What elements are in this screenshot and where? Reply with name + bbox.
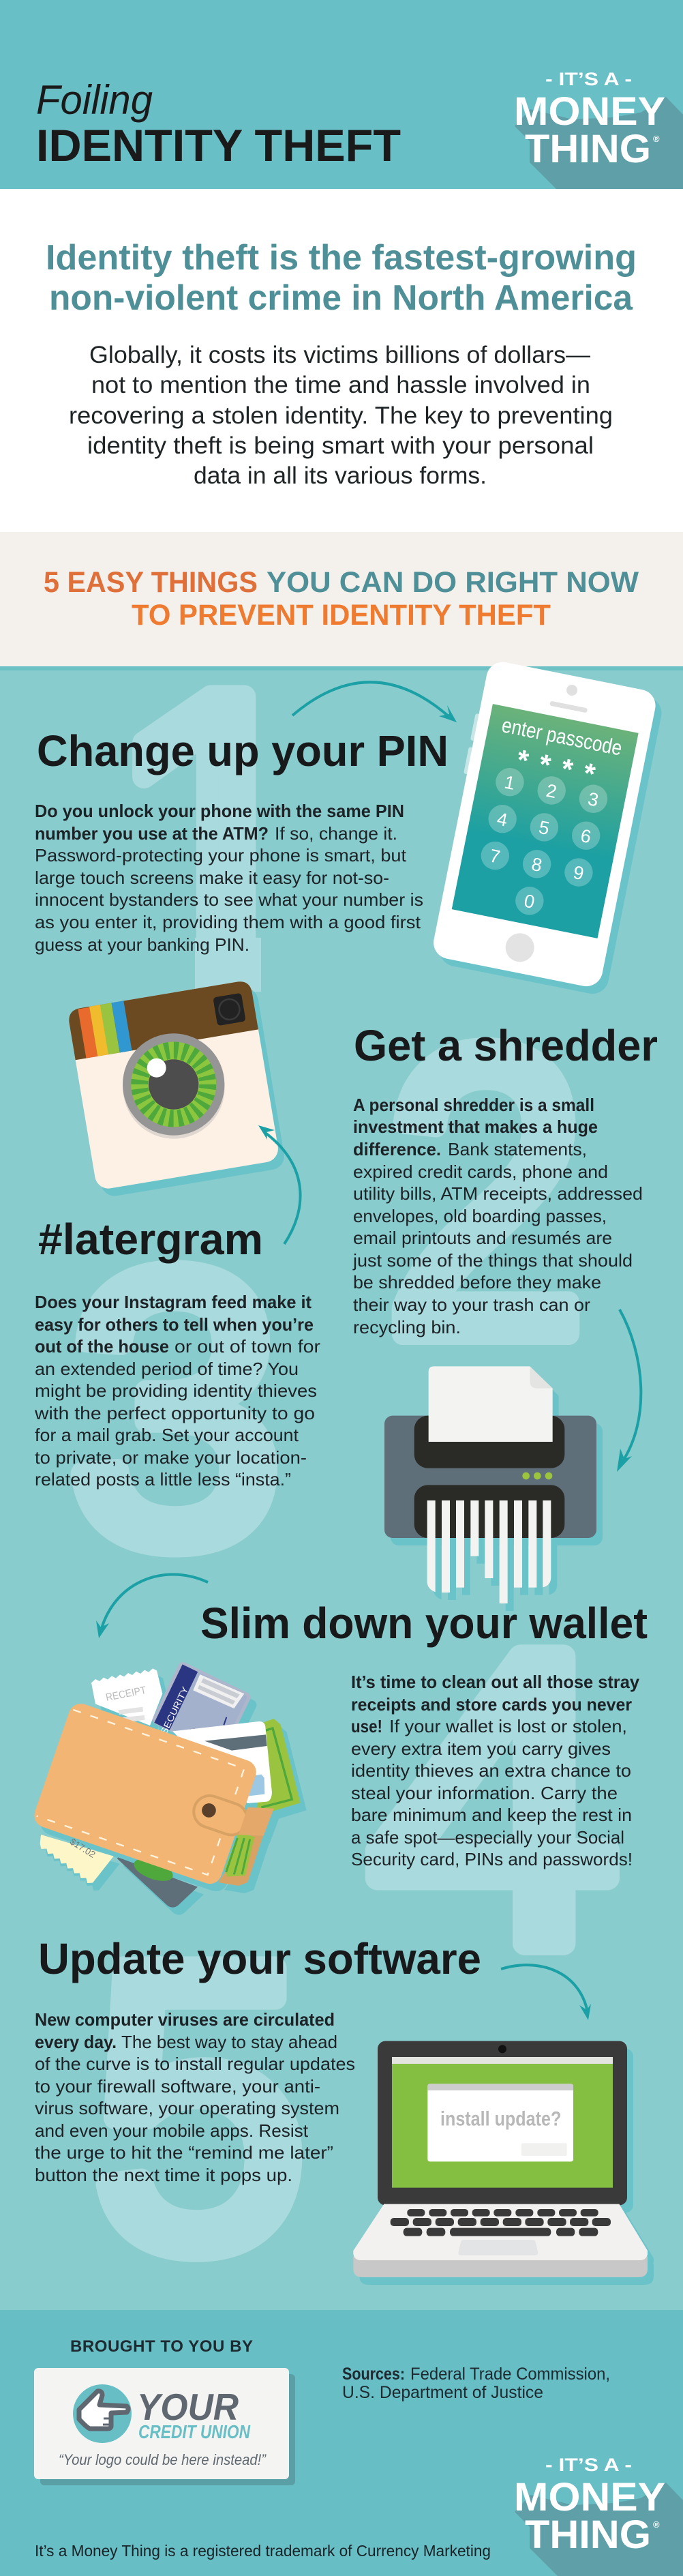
logo: It's a Money Thing footer xyxy=(514,2455,683,2576)
body text: be shredded before they make xyxy=(353,1272,601,1292)
sponsor logo card: CREDIT UNION xyxy=(138,2421,251,2442)
arrow to laptop xyxy=(501,1965,591,2020)
section 2: get a shredder xyxy=(352,1021,658,1603)
panel: 5 easy things banner: 5 EASY THINGS xyxy=(44,566,258,599)
body text: or out of town for xyxy=(174,1336,320,1357)
icon: phone: 4 xyxy=(496,808,509,831)
title: IDENTITY THEFT xyxy=(36,120,401,171)
body text: just some of the things that should xyxy=(352,1250,633,1271)
body text: the urge to hit the “remind me later” xyxy=(35,2142,333,2163)
body text: every extra item you carry gives xyxy=(351,1738,611,1759)
icon: wallet: SECURITY xyxy=(159,1685,190,1736)
body text xyxy=(34,1292,320,1490)
body text: with the perfect opportunity to go xyxy=(34,1403,315,1423)
panel: footer xyxy=(0,2310,683,2576)
body text: steal your information. Carry the xyxy=(351,1783,618,1803)
body text: Security card, PINs and passwords! xyxy=(351,1849,633,1869)
body text: use! xyxy=(351,1716,382,1736)
body text: large touch screens make it easy for not-so- xyxy=(35,868,389,888)
intro paragraph: recovering a stolen identity. The key to preventing xyxy=(69,402,613,429)
numeral 1: 1 xyxy=(104,607,333,1067)
icon: phone: * * * * xyxy=(514,743,598,790)
logo: It's a Money Thing: MONEY xyxy=(514,89,665,134)
intro paragraph: Globally, it costs its victims billions of dollars— xyxy=(89,342,590,368)
body text: every day. xyxy=(35,2032,117,2052)
logo: It's a Money Thing footer: ® xyxy=(653,2519,660,2530)
body text: bare minimum and keep the rest in xyxy=(351,1805,632,1825)
icon: phone: 8 xyxy=(530,854,544,876)
body text xyxy=(35,801,423,955)
sources xyxy=(342,2365,610,2402)
sources: Federal Trade Commission, xyxy=(410,2365,610,2384)
icon: laptop xyxy=(353,2041,648,2277)
intro paragraph xyxy=(69,342,613,489)
icon: wallet: RECEIPT xyxy=(105,1685,147,1704)
logo: It's a Money Thing footer: THING xyxy=(525,2513,651,2557)
body text: utility bills, ATM receipts, addressed xyxy=(353,1183,643,1204)
body text: out of the house xyxy=(35,1336,169,1357)
body text: Bank statements, xyxy=(448,1139,587,1159)
icon: phone: enter passcode xyxy=(500,713,624,760)
arrow to shredder xyxy=(617,1309,641,1472)
body text: Do you unlock your phone with the same PIN xyxy=(35,801,404,821)
logo: It's a Money Thing footer: - IT’S A - xyxy=(545,2455,632,2475)
sponsor logo card xyxy=(34,2368,295,2485)
body text: Does your Instagram feed make it xyxy=(35,1292,312,1312)
panel: header xyxy=(0,0,683,189)
icon: wallet xyxy=(31,1661,301,1908)
logo: It's a Money Thing: ® xyxy=(653,134,660,144)
sponsor logo card: YOUR xyxy=(137,2386,239,2428)
icon: phone: 6 xyxy=(579,825,593,847)
intro heading: non-violent crime in North America xyxy=(49,278,633,318)
icon: phone: 1 xyxy=(502,772,517,794)
icon: camera xyxy=(67,979,280,1191)
title xyxy=(36,77,401,171)
icon: phone: 5 xyxy=(537,817,551,839)
body text: New computer viruses are circulated xyxy=(35,2009,335,2030)
body text: to private, or make your location- xyxy=(35,1447,307,1468)
icon: wallet: 789 xyxy=(187,1728,196,1740)
logo: It's a Money Thing xyxy=(514,69,683,189)
body text: If your wallet is lost or stolen, xyxy=(389,1716,627,1736)
body text: as you enter it, providing them with a good first xyxy=(35,912,421,932)
body text: virus software, your operating system xyxy=(35,2098,339,2118)
trademark note: It’s a Money Thing is a registered trademark of Currency Marketing xyxy=(35,2542,491,2560)
body text: to your firewall software, your anti- xyxy=(35,2076,320,2097)
body text: investment that makes a huge xyxy=(353,1116,598,1137)
body text: innocent bystanders to see what your number is xyxy=(35,889,423,910)
body text: and even your mobile apps. Resist xyxy=(35,2120,309,2141)
body text: related posts a little less “insta.” xyxy=(35,1469,291,1490)
numeral 4: 4 xyxy=(367,1565,620,2032)
numeral 5: 5 xyxy=(91,1880,307,2333)
section 5: update your software xyxy=(35,1934,648,2277)
numeral 2: 2 xyxy=(384,965,588,1420)
sponsor logo card: “Your logo could be here instead!” xyxy=(59,2451,267,2468)
numeral 3: 3 xyxy=(67,1192,283,1625)
body text: might be providing identity thieves xyxy=(35,1380,317,1401)
heading: Change up your PIN xyxy=(37,726,449,775)
icon: phone: 7 xyxy=(488,845,502,868)
body text: of the curve is to install regular updates xyxy=(35,2054,355,2074)
body text: recycling bin. xyxy=(353,1317,461,1337)
section 3: latergram xyxy=(34,979,320,1490)
icon: pointing hand xyxy=(79,2391,128,2429)
intro paragraph: not to mention the time and hassle involved in xyxy=(91,372,590,398)
arrow to wallet xyxy=(96,1575,208,1638)
brought to you by label: BROUGHT TO YOU BY xyxy=(70,2337,253,2356)
icon: laptop: install update? xyxy=(440,2108,561,2131)
body text: number you use at the ATM? xyxy=(35,823,269,844)
body text: expired credit cards, phone and xyxy=(353,1161,608,1182)
body text xyxy=(351,1672,640,1869)
panel: tips background xyxy=(0,666,683,2310)
icon: wallet: $17.02 xyxy=(68,1836,97,1860)
panel: 5 easy things banner: TO PREVENT IDENTITY THEFT xyxy=(132,599,551,632)
body text: an extended period of time? You xyxy=(35,1359,299,1379)
body text: If so, change it. xyxy=(275,823,397,844)
body text: email printouts and resumés are xyxy=(353,1228,612,1248)
arrow to camera xyxy=(258,1125,301,1244)
body text xyxy=(35,2009,355,2185)
body text: It’s time to clean out all those stray xyxy=(351,1672,640,1692)
intro heading xyxy=(46,238,637,318)
body text: Password-protecting your phone is smart, but xyxy=(35,845,407,865)
intro heading: Identity theft is the fastest-growing xyxy=(46,238,637,278)
icon: phone: 3 xyxy=(586,788,601,810)
icon: phone xyxy=(427,659,658,989)
body text: for a mail grab. Set your account xyxy=(35,1425,299,1445)
body text xyxy=(352,1095,643,1337)
icon: phone: 2 xyxy=(545,780,558,802)
arrow to phone xyxy=(292,682,457,722)
logo: It's a Money Thing: THING xyxy=(525,127,651,171)
heading: Update your software xyxy=(38,1934,481,1983)
body text: The best way to stay ahead xyxy=(121,2032,337,2052)
body text: difference. xyxy=(353,1139,441,1159)
sources: U.S. Department of Justice xyxy=(342,2383,543,2402)
body text: receipts and store cards you never xyxy=(351,1694,632,1715)
panel: 5 easy things banner xyxy=(0,532,683,666)
intro paragraph: identity theft is being smart with your personal xyxy=(87,432,594,459)
body text: button the next time it pops up. xyxy=(35,2165,292,2185)
body text: their way to your trash can or xyxy=(353,1294,590,1315)
heading: #latergram xyxy=(38,1215,263,1264)
icon: shredder xyxy=(384,1366,596,1603)
logo: It's a Money Thing footer: MONEY xyxy=(514,2475,665,2519)
body text: a safe spot—especially your Social xyxy=(351,1827,624,1848)
body text: guess at your banking PIN. xyxy=(35,934,249,955)
body text: identity thieves an extra chance to xyxy=(351,1760,631,1781)
title: Foiling xyxy=(36,77,153,123)
panel: 5 easy things banner: YOU CAN DO RIGHT NOW xyxy=(267,566,639,599)
body text: A personal shredder is a small xyxy=(353,1095,594,1115)
icon: phone: 9 xyxy=(571,862,586,884)
logo: It's a Money Thing: - IT’S A - xyxy=(545,69,632,89)
icon: phone: 0 xyxy=(522,891,536,913)
heading: Get a shredder xyxy=(354,1021,658,1070)
sources: Sources: xyxy=(342,2365,405,2384)
body text: easy for others to tell when you’re xyxy=(35,1314,314,1335)
section 4: slim down your wallet xyxy=(31,1575,648,1908)
intro paragraph: data in all its various forms. xyxy=(194,462,487,489)
body text: envelopes, old boarding passes, xyxy=(353,1206,607,1226)
heading: Slim down your wallet xyxy=(200,1599,648,1648)
panel: intro xyxy=(0,189,683,532)
section 1: change up your PIN xyxy=(35,659,658,989)
